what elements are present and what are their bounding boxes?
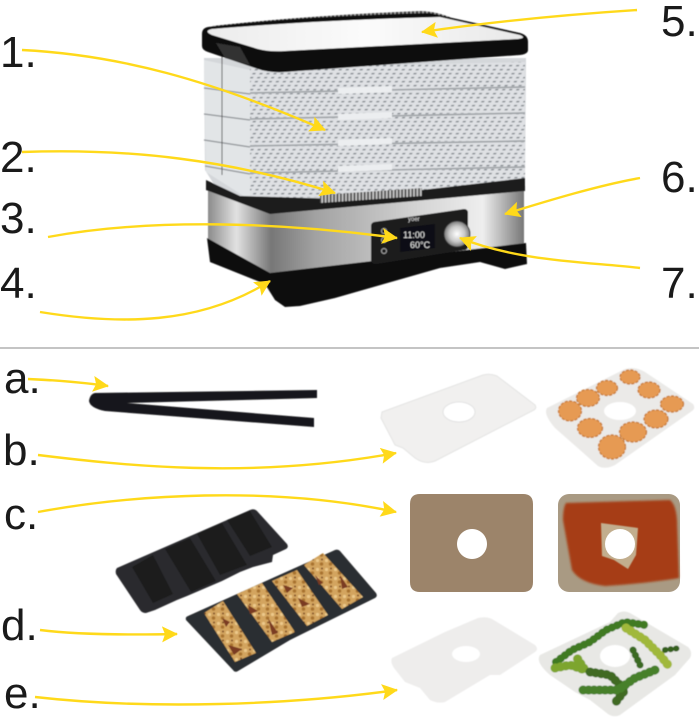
number labels: 3. bbox=[0, 194, 37, 243]
silicone bar mold: empty bbox=[116, 509, 288, 613]
letter labels: b. bbox=[3, 426, 40, 475]
panel: food dehydrator product bbox=[202, 11, 528, 307]
divider bbox=[0, 347, 699, 349]
control panel: 60°C bbox=[410, 240, 431, 250]
icon: tongs bbox=[89, 390, 317, 427]
sheet b: with cookies bbox=[546, 368, 694, 468]
stainless steel base bbox=[208, 188, 524, 275]
silicone bar mold: with granola bars bbox=[186, 550, 377, 672]
sheet c: with fruit leather bbox=[558, 494, 680, 592]
sheet e: with herbs bbox=[539, 612, 691, 716]
black top band of base bbox=[206, 178, 525, 214]
icon: top grille bbox=[212, 11, 452, 34]
sheet b: plain plastic tray bbox=[381, 374, 536, 462]
number labels: 1. bbox=[0, 28, 37, 77]
number labels bbox=[0, 0, 698, 308]
sheet e: mesh mat bbox=[391, 617, 537, 703]
LCD display bbox=[400, 224, 435, 252]
trays stack bbox=[204, 55, 526, 205]
number labels: 4. bbox=[0, 259, 37, 308]
sheet c: teflon mat bbox=[410, 494, 533, 592]
number labels: 2. bbox=[0, 133, 37, 182]
control panel: yoer bbox=[408, 217, 420, 223]
lid bbox=[202, 13, 528, 72]
control panel bbox=[371, 209, 470, 264]
knob bbox=[444, 221, 470, 247]
arrows: top bbox=[22, 10, 640, 320]
letter labels: d. bbox=[1, 601, 38, 650]
heating fins bbox=[320, 188, 422, 203]
black feet bbox=[207, 238, 527, 307]
letter labels: e. bbox=[4, 669, 41, 718]
letter labels: a. bbox=[4, 354, 41, 403]
control panel: 11:00 bbox=[403, 230, 425, 240]
letter labels: c. bbox=[4, 490, 38, 539]
number labels: 7. bbox=[661, 259, 698, 308]
arrows: accessories bbox=[28, 379, 397, 704]
letter labels bbox=[1, 354, 41, 718]
number labels: 6. bbox=[661, 153, 698, 202]
